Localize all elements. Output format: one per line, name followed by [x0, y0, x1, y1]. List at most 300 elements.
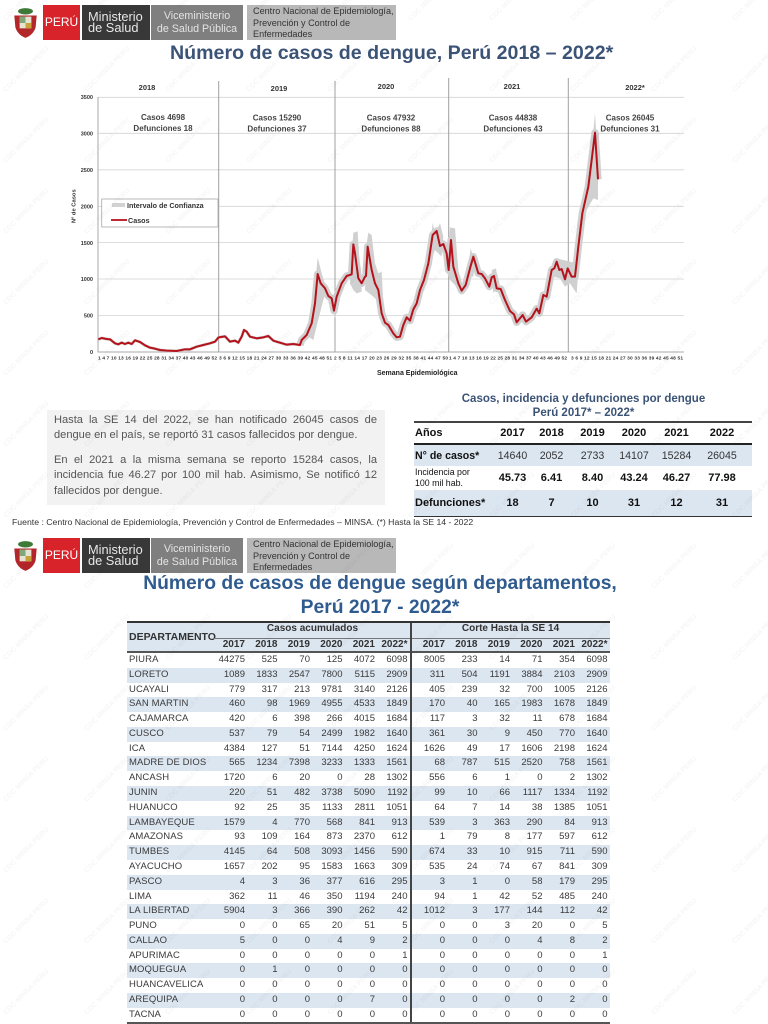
- logo: Viceministerio: [151, 5, 243, 40]
- table rows: 915: [527, 846, 542, 857]
- table header: 2019: [288, 639, 310, 650]
- legend: [102, 199, 218, 227]
- x axis week labels: 1 4 7 10 13 16 19 22 25 28 31 34 37 40 43 46 49 52: [449, 356, 567, 362]
- table rows: 482: [294, 787, 310, 798]
- table rows: 0: [537, 772, 542, 783]
- table rows: 1684: [386, 713, 408, 724]
- table rows: 0: [305, 935, 310, 946]
- table rows: 0: [505, 950, 510, 961]
- table: cases, incidence and deaths: 2733: [581, 450, 604, 462]
- annual totals: Defunciones 37: [247, 124, 307, 134]
- table rows: 1678: [554, 698, 575, 709]
- legend: Casos: [128, 216, 150, 225]
- table rows: 612: [392, 831, 408, 842]
- table rows: 92: [234, 802, 245, 813]
- table rows: PASCO: [129, 876, 162, 887]
- table rows: 8: [505, 831, 510, 842]
- table rows: 317: [262, 684, 278, 695]
- table: cases, incidence and deaths: 10: [586, 497, 599, 509]
- table rows: 4955: [321, 698, 342, 709]
- table rows: 240: [592, 890, 608, 902]
- table: cases, incidence and deaths: 12: [670, 497, 683, 509]
- table header: 2021: [553, 639, 575, 650]
- table rows: 36: [299, 876, 310, 887]
- table rows: 2126: [386, 684, 408, 695]
- table header: 2017: [423, 639, 445, 650]
- table rows: 0: [440, 950, 445, 961]
- table rows: 2370: [354, 831, 375, 842]
- table rows: 1579: [224, 817, 245, 828]
- table rows: CAJAMARCA: [129, 713, 188, 724]
- logo: Centro Nacional: [247, 5, 396, 40]
- table rows: AYACUCHO: [129, 861, 182, 872]
- table rows: 10: [499, 846, 510, 857]
- table rows: 290: [527, 817, 542, 828]
- y axis labels: 1500: [81, 241, 93, 247]
- table: cases, incidence and deaths: [414, 421, 752, 517]
- annual totals: Casos 47932: [367, 114, 416, 122]
- table rows: 0: [305, 950, 310, 961]
- table: cases, incidence and deaths: 2019: [580, 426, 605, 438]
- table rows: 1334: [554, 787, 575, 798]
- table: cases, incidence and deaths: 2052: [540, 450, 563, 462]
- table rows: 2: [570, 994, 575, 1005]
- table rows: APURIMAC: [129, 950, 180, 961]
- y axis labels: 1000: [81, 277, 93, 283]
- table rows: 20: [299, 772, 310, 783]
- table rows: 20: [332, 920, 342, 931]
- table rows: 0: [240, 920, 245, 931]
- annual totals: Casos 15290: [253, 114, 302, 122]
- table rows: 0: [537, 1009, 542, 1020]
- table rows: 515: [494, 757, 510, 768]
- table rows: 2909: [386, 669, 408, 680]
- table rows: 64: [434, 802, 445, 813]
- table rows: 525: [262, 654, 278, 665]
- table rows: 30: [467, 728, 478, 739]
- table: cases, incidence and deaths: N° de casos*: [415, 450, 479, 462]
- table rows: 51: [299, 743, 310, 754]
- table rows: 2: [570, 772, 575, 783]
- table rows: 64: [267, 846, 278, 857]
- logo: PERÚ: PERÚ: [45, 15, 78, 29]
- table rows: 612: [592, 831, 608, 842]
- table header: 2017: [223, 639, 245, 650]
- table rows: 1982: [354, 728, 375, 739]
- table rows: 0: [537, 979, 542, 990]
- table rows: 213: [294, 684, 310, 695]
- table rows: 54: [299, 728, 310, 739]
- table rows: 2520: [521, 757, 542, 768]
- table rows: 0: [505, 964, 510, 975]
- table rows: 1: [440, 831, 445, 842]
- table: cases, incidence and deaths: 2021: [664, 426, 689, 438]
- table rows: 2811: [355, 802, 375, 813]
- title: departments: Perú 2017 - 2022*: [301, 596, 459, 618]
- table rows: HUANCAVELICA: [129, 979, 203, 990]
- table rows: 74: [499, 861, 510, 872]
- table rows: TACNA: [129, 1009, 161, 1020]
- table rows: 4145: [224, 846, 245, 857]
- table rows: 0: [370, 979, 375, 990]
- table rows: 0: [472, 964, 478, 975]
- table rows: 1561: [386, 757, 408, 768]
- table rows: 0: [370, 964, 375, 975]
- title: chart: Número de casos de dengue, Perú 2018 – 2022*: [170, 42, 613, 64]
- table rows: 770: [294, 817, 310, 828]
- table rows: 0: [505, 876, 510, 887]
- table rows: 38: [532, 802, 542, 813]
- table rows: 0: [337, 964, 342, 975]
- table rows: 0: [602, 964, 608, 975]
- y axis labels: 3500: [81, 95, 93, 101]
- table rows: CUSCO: [129, 728, 164, 739]
- table rows: 450: [527, 728, 542, 739]
- table rows: 2198: [554, 743, 575, 754]
- table rows: HUANUCO: [129, 802, 178, 813]
- logo: Viceministerio: de Salud Pública: [157, 556, 237, 568]
- annual totals: Casos 4698: [141, 113, 186, 122]
- table: cases, incidence and deaths: 14640: [498, 450, 527, 462]
- table rows: 79: [267, 728, 278, 739]
- table rows: 65: [299, 920, 310, 931]
- annual totals: Defunciones 18: [133, 124, 193, 133]
- table rows: 568: [327, 817, 342, 828]
- table rows: AMAZONAS: [129, 831, 183, 842]
- table rows: 2: [602, 935, 608, 946]
- table rows: LAMBAYEQUE: [129, 817, 195, 828]
- table rows: MADRE DE DIOS: [129, 757, 206, 768]
- table rows: 674: [429, 846, 445, 857]
- table rows: 7: [370, 994, 375, 1005]
- header: logos top: [14, 5, 396, 40]
- logo: Ministerio de Salud: Ministerio: [88, 542, 143, 557]
- table rows: 913: [592, 817, 608, 828]
- table rows: 0: [440, 935, 445, 946]
- paragraph: 2021 comparison: En el 2021 a la misma semana se reporto 15284 casos, la incidencia fue 46.27 por 100 mil hab. Asimismo, Se notificó 12 fallecidos por dengue.: [54, 454, 377, 497]
- table rows: 1849: [386, 698, 408, 709]
- table rows: 0: [472, 979, 478, 990]
- table rows: 1005: [554, 684, 575, 695]
- logo: Centro Nacional: Centro Nacional de Epidemiología,: [253, 539, 394, 549]
- table rows: 0: [440, 1009, 445, 1020]
- annual totals: Defunciones 88: [361, 124, 421, 134]
- table rows: 0: [402, 979, 408, 990]
- table rows: 1051: [386, 802, 408, 813]
- table header: 2022*: [581, 639, 608, 650]
- table rows: LA LIBERTAD: [129, 905, 189, 916]
- table rows: 7144: [321, 743, 342, 754]
- table: cases, incidence and deaths: 2018: [539, 426, 564, 438]
- table header: 2020: [320, 639, 342, 650]
- y axis labels: 0: [90, 350, 93, 356]
- title: departments: [143, 572, 617, 618]
- table rows: 556: [429, 772, 445, 783]
- table rows: 4384: [224, 743, 245, 754]
- table: cases, incidence and deaths: 46.27: [663, 472, 690, 484]
- table: cases by department: [127, 621, 610, 1023]
- logo: Ministerio de Salud: [82, 538, 150, 572]
- table rows: SAN MARTIN: [129, 698, 188, 709]
- logo: Centro Nacional: Centro Nacional de Epidemiología,: [253, 6, 394, 16]
- table rows: 179: [559, 876, 575, 887]
- table rows: 5: [240, 935, 245, 946]
- table rows: 4533: [354, 698, 375, 709]
- table rows: 3: [505, 920, 510, 931]
- y axis labels: 3000: [81, 132, 93, 138]
- table rows: 0: [402, 994, 408, 1005]
- table rows: 0: [505, 994, 510, 1005]
- table rows: 42: [597, 905, 608, 916]
- table rows: 0: [570, 1009, 575, 1020]
- table rows: 35: [299, 802, 310, 813]
- table rows: 109: [262, 831, 278, 842]
- table rows: 8005: [424, 654, 445, 665]
- year labels: [139, 82, 645, 93]
- table rows: 49: [467, 743, 478, 754]
- table rows: 9: [370, 935, 375, 946]
- table rows: 117: [430, 713, 445, 724]
- table rows: 295: [392, 876, 408, 887]
- table rows: 3093: [321, 846, 342, 857]
- table rows: 7800: [321, 669, 342, 680]
- table rows: 0: [440, 994, 445, 1005]
- text block: summary: [47, 410, 385, 505]
- table header: [127, 623, 610, 653]
- table rows: 239: [462, 684, 478, 695]
- table rows: 2103: [554, 669, 575, 680]
- table rows: 99: [434, 787, 445, 798]
- table rows: 0: [602, 994, 608, 1005]
- table rows: 0: [272, 950, 278, 961]
- table rows: 1192: [587, 787, 608, 798]
- table: cases, incidence and deaths: 31: [716, 497, 728, 509]
- table rows: CALLAO: [129, 935, 167, 946]
- line chart: dengue cases 2018-2022: [72, 78, 684, 377]
- table rows: 539: [429, 817, 445, 828]
- table rows: 1234: [256, 757, 278, 768]
- table rows: 112: [560, 905, 575, 916]
- table rows: 5: [402, 920, 408, 931]
- table rows: 6: [272, 772, 278, 783]
- table rows: 1: [602, 950, 608, 961]
- logo: Centro Nacional: Enfermedades: [253, 29, 312, 39]
- table rows: 0: [240, 979, 245, 990]
- table rows: 3: [440, 876, 445, 887]
- logo: Viceministerio: de Salud Pública: [157, 23, 237, 35]
- table rows: 0: [240, 964, 245, 975]
- table rows: 1089: [224, 669, 245, 680]
- table rows: 0: [305, 964, 310, 975]
- table rows: AREQUIPA: [129, 994, 178, 1005]
- table rows: 262: [359, 905, 375, 916]
- y axis title: Nº de Casos: [72, 189, 78, 223]
- table rows: 0: [272, 1009, 278, 1020]
- logo: PERÚ: PERÚ: [45, 548, 78, 562]
- table rows: 44275: [219, 654, 245, 665]
- table header: DEPARTAMENTO: [129, 631, 216, 643]
- table rows: 390: [327, 905, 342, 916]
- table rows: 0: [472, 950, 478, 961]
- table rows: 1969: [289, 698, 310, 709]
- table rows: 170: [429, 698, 445, 709]
- table rows: 7: [472, 802, 478, 813]
- table rows: 70: [299, 654, 310, 665]
- table rows: 4250: [354, 743, 375, 754]
- table rows: 485: [559, 890, 575, 902]
- icon: coat of arms: [14, 541, 37, 571]
- table rows: PIURA: [129, 654, 159, 665]
- table rows: 1117: [523, 787, 542, 798]
- table header: 2021: [353, 639, 375, 650]
- table rows: 420: [229, 713, 245, 724]
- table rows: 1606: [521, 743, 542, 754]
- table: cases, incidence and deaths: Defunciones*: [415, 497, 485, 509]
- table rows: 7398: [289, 757, 310, 768]
- table rows: 0: [472, 935, 478, 946]
- table rows: 202: [262, 861, 278, 872]
- table rows: 3: [272, 876, 278, 887]
- table rows: 0: [272, 979, 278, 990]
- table rows: 95: [299, 861, 310, 872]
- table: cases, incidence and deaths: 15284: [662, 450, 691, 462]
- table rows: 504: [462, 669, 478, 680]
- table rows: 1385: [554, 802, 575, 813]
- source note: Fuente : Centro Nacional de Epidemiología, Prevención y Control de Enfermedades – MINSA. (*) Hasta la SE 14 - 2022: [12, 517, 473, 527]
- table rows: 0: [472, 920, 478, 931]
- table rows: 125: [327, 654, 342, 665]
- table rows: 913: [392, 817, 408, 828]
- table rows: 0: [337, 979, 342, 990]
- table rows: 1: [402, 950, 408, 961]
- table: cases, incidence and deaths: 77.98: [708, 472, 736, 484]
- table rows: 11: [268, 890, 278, 902]
- table rows: 4015: [354, 713, 375, 724]
- x axis week labels: 3 6 9 12 15 18 21 24 27 30 33 36 39 42 45 48 51: [571, 356, 683, 362]
- table rows: 0: [472, 1009, 478, 1020]
- table rows: 0: [402, 1009, 408, 1020]
- table rows: 42: [499, 890, 510, 902]
- table: cases, incidence and deaths: 6.41: [541, 472, 562, 484]
- table rows: 0: [337, 772, 342, 783]
- table: cases, incidence and deaths: 8.40: [582, 472, 603, 484]
- table rows: 5115: [355, 669, 375, 680]
- table rows: 1333: [354, 757, 375, 768]
- table rows: 9781: [321, 684, 342, 695]
- logo: Centro Nacional: Enfermedades: [253, 562, 312, 572]
- table rows: 309: [592, 861, 608, 872]
- table rows: ANCASH: [129, 772, 169, 783]
- paragraph: 2022 summary: Hasta la SE 14 del 2022, se han notificado 26045 casos de dengue en el país, se reportó 31 casos fallecidos por dengue.: [54, 414, 377, 441]
- table rows: 590: [592, 846, 608, 857]
- table: cases, incidence and deaths: 100 mil hab.: [415, 478, 463, 488]
- x axis week labels: 2 5 8 11 14 17 20 23 26 29 32 35 38 41 44 47 50: [334, 356, 448, 362]
- table rows: 79: [467, 831, 478, 842]
- annual totals: [133, 113, 660, 134]
- logo: Ministerio de Salud: Ministerio: [88, 9, 143, 24]
- table rows: 0: [505, 1009, 510, 1020]
- table rows: LIMA: [129, 890, 152, 902]
- table rows: 377: [327, 876, 342, 887]
- table rows: 398: [294, 713, 310, 724]
- table: cases, incidence and deaths: 18: [506, 497, 519, 509]
- table rows: 0: [537, 994, 542, 1005]
- table rows: 295: [592, 876, 608, 887]
- year labels: 2022*: [625, 83, 645, 92]
- year labels: 2018: [139, 83, 155, 92]
- table header: 2019: [488, 639, 510, 650]
- table rows: 40: [467, 698, 478, 709]
- x axis week labels: 3 6 9 12 15 18 21 24 27 30 33 36 39 42 45 48 51: [219, 356, 332, 362]
- table rows: 4: [240, 876, 245, 887]
- table rows: 1624: [386, 743, 408, 754]
- table rows: 460: [229, 698, 245, 709]
- table rows: 1626: [424, 743, 445, 754]
- table rows: 2: [402, 935, 408, 946]
- table rows: 32: [499, 713, 510, 724]
- table rows: 2126: [586, 684, 608, 695]
- grid and axes: [98, 97, 684, 316]
- table rows: 266: [327, 713, 342, 724]
- table rows: 2547: [289, 669, 310, 680]
- table rows: 5090: [354, 787, 375, 798]
- table rows: 565: [229, 757, 245, 768]
- table rows: 0: [272, 935, 278, 946]
- table rows: 1640: [586, 728, 608, 739]
- table rows: 5904: [224, 905, 245, 916]
- logo: Viceministerio: [151, 538, 243, 572]
- table rows: 25: [267, 802, 278, 813]
- icon: coat of arms: [14, 8, 37, 38]
- table rows: PUNO: [129, 920, 157, 931]
- table rows: 3233: [321, 757, 342, 768]
- table rows: 0: [402, 964, 408, 975]
- table rows: 6098: [386, 654, 408, 665]
- table rows: 1663: [354, 861, 375, 872]
- table rows: 354: [559, 654, 575, 665]
- annual totals: Defunciones 31: [600, 124, 660, 134]
- table: cases, incidence and deaths: 26045: [707, 450, 737, 462]
- table rows: 51: [364, 920, 375, 931]
- table rows: 0: [505, 979, 510, 990]
- table rows: 0: [570, 964, 575, 975]
- table rows: ICA: [129, 743, 145, 754]
- table rows: 366: [294, 905, 310, 916]
- table rows: 770: [559, 728, 575, 739]
- year labels: 2020: [378, 82, 394, 91]
- table: cases, incidence and deaths: 31: [628, 497, 640, 509]
- logo: Centro Nacional: Prevención y Control de: [253, 550, 350, 560]
- table rows: 46: [299, 890, 310, 902]
- table rows: 0: [602, 1009, 608, 1020]
- logo: Ministerio de Salud: de Salud: [88, 20, 139, 35]
- table rows: 1302: [586, 772, 608, 783]
- table rows: 0: [337, 994, 342, 1005]
- table rows: 1684: [586, 713, 608, 724]
- table header: 2022*: [381, 639, 408, 650]
- table rows: 28: [364, 772, 375, 783]
- table rows: 4: [272, 817, 278, 828]
- table rows: 0: [305, 994, 310, 1005]
- y axis labels: [81, 95, 93, 356]
- table rows: 3: [472, 713, 478, 724]
- table rows: 220: [229, 787, 245, 798]
- table: cases, incidence and deaths: 14107: [619, 450, 649, 462]
- table rows: 14: [499, 802, 510, 813]
- table rows: 1640: [386, 728, 408, 739]
- table rows: 144: [527, 905, 542, 916]
- table rows: 0: [440, 979, 445, 990]
